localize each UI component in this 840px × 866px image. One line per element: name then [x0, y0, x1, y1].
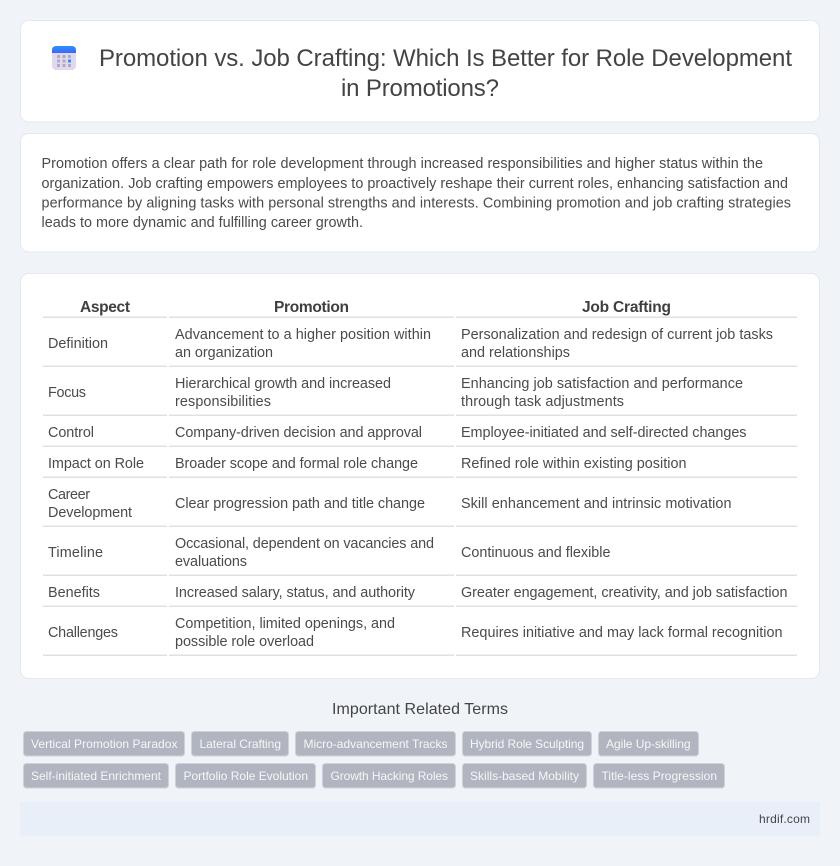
row: Definition: an organization [175, 345, 273, 361]
intro text: performance by aligning tasks with personal strengths and interests. Combining promotion and job crafting strategies [42, 196, 791, 212]
row: Impact on Role: Refined role within existing position [461, 456, 686, 472]
tags: related terms: Vertical Promotion Paradox [31, 737, 178, 751]
row: Career Development: Clear progression path and title change [175, 496, 425, 512]
row: Focus: Enhancing job satisfaction and performance [461, 376, 743, 392]
tags: related terms: Hybrid Role Sculpting [470, 737, 584, 751]
title: Promotion vs. Job Crafting: Which Is Better for Role Development [99, 45, 792, 72]
table header: Promotion [274, 299, 349, 316]
row: Impact on Role [48, 456, 686, 472]
heading: related terms: Important Related Terms [332, 701, 508, 718]
panel: introduction [20, 134, 820, 252]
row: Focus: responsibilities [175, 394, 271, 410]
tags: related terms: Micro-advancement Tracks [304, 737, 448, 751]
title: in Promotions? [341, 75, 499, 102]
row: Control: Control [48, 425, 94, 441]
row: Timeline: Occasional, dependent on vacancies and [175, 536, 434, 552]
table header [80, 299, 671, 316]
row: Focus: Focus [48, 385, 86, 401]
row: Benefits [48, 585, 788, 601]
row: Challenges: Competition, limited openings, and [175, 616, 395, 632]
panel: comparison table [20, 274, 820, 678]
panel: title header [20, 20, 820, 122]
intro text: leads to more dynamic and fulfilling career growth. [42, 215, 363, 231]
row: Control: Employee-initiated and self-directed changes [461, 425, 746, 441]
table header: Aspect [80, 299, 130, 316]
row: Benefits: Benefits [48, 585, 100, 601]
tags: related terms: Skills-based Mobility [470, 769, 579, 783]
tags: related terms: Lateral Crafting [200, 737, 281, 751]
row: Career Development: Career [48, 487, 90, 503]
row: Challenges: Challenges [48, 625, 118, 641]
row: Focus [48, 376, 743, 410]
row: Control [48, 425, 746, 441]
row: Timeline: Continuous and flexible [461, 545, 610, 561]
row: Challenges [48, 616, 782, 650]
row: Definition [48, 327, 773, 361]
tags: related terms: Portfolio Role Evolution [184, 769, 308, 783]
row: Timeline: evaluations [175, 554, 247, 570]
row: Career Development: Skill enhancement and intrinsic motivation [461, 496, 732, 512]
row: Challenges: Requires initiative and may lack formal recognition [461, 625, 782, 641]
row: Career Development: Development [48, 505, 132, 521]
row: Focus: through task adjustments [461, 394, 624, 410]
tags: related terms: Self-initiated Enrichment [31, 769, 162, 783]
row: Benefits: Greater engagement, creativity, and job satisfaction [461, 585, 788, 601]
row: Impact on Role: Impact on Role [48, 456, 144, 472]
tags: related terms: Agile Up-skilling [606, 737, 690, 751]
row: Focus: Hierarchical growth and increased [175, 376, 391, 392]
row: Definition: Advancement to a higher position within [175, 327, 431, 343]
row: Benefits: Increased salary, status, and authority [175, 585, 416, 601]
intro text: organization. Job crafting empowers employees to proactively reshape their current roles, enhancing satisfaction and [42, 176, 788, 192]
row: Definition: and relationships [461, 345, 570, 361]
row: Timeline: Timeline [48, 545, 103, 561]
row: Timeline [48, 536, 610, 570]
icon: calendar [52, 46, 76, 70]
row: Control: Company-driven decision and approval [175, 425, 422, 441]
footer: hrdif.com [759, 812, 810, 826]
footer [20, 802, 820, 836]
tags: related terms [24, 732, 724, 788]
row: Challenges: possible role overload [175, 634, 314, 650]
tags: related terms: Title-less Progression [602, 769, 717, 783]
row: Definition: Personalization and redesign of current job tasks [461, 327, 773, 343]
intro text: Promotion offers a clear path for role development through increased responsibilities and higher status within the [42, 156, 763, 172]
tags: related terms: Growth Hacking Roles [330, 769, 448, 783]
table header: Job Crafting [582, 299, 671, 316]
row: Impact on Role: Broader scope and formal role change [175, 456, 418, 472]
row: Career Development [48, 487, 732, 521]
row: Definition: Definition [48, 336, 108, 352]
